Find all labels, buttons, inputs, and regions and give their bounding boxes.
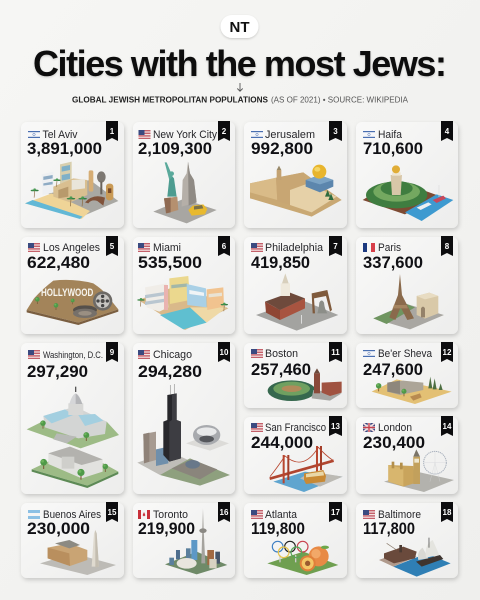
rank badge: 13 (331, 422, 340, 431)
flag: USA (251, 423, 263, 432)
flag: USA (28, 350, 40, 359)
illustration: Olympic rings and peach (267, 541, 338, 575)
rank badge: 11 (331, 348, 340, 357)
population: 535,500 (138, 253, 202, 272)
rank badge: 5 (110, 242, 115, 251)
flag: USA (251, 243, 263, 252)
rank badge (106, 342, 118, 362)
illustration: Statue of Liberty and Empire State (153, 162, 217, 223)
population: 710,600 (363, 139, 423, 158)
panel: Be'er Sheva (356, 342, 458, 408)
city name: Buenos Aires (43, 509, 101, 521)
flag: USA (138, 350, 150, 359)
city name: Toronto (153, 509, 188, 521)
flag: USA (251, 510, 263, 519)
rank badge: 7 (333, 242, 338, 251)
population: 219,900 (138, 519, 195, 538)
city name: Chicago (153, 349, 192, 361)
city name: New York City (153, 129, 217, 141)
rank badge: 2 (222, 127, 227, 136)
city name: Los Angeles (43, 242, 100, 254)
illustration: Parliament, Big Ben and London Eye (384, 449, 454, 492)
city name: Baltimore (378, 509, 421, 521)
illustration: U.S. Capitol and White House (27, 387, 119, 488)
illustration: Baltimore harbor and tall ship (379, 538, 451, 577)
logo badge: NT (220, 15, 258, 38)
city name: Tel Aviv (42, 129, 78, 141)
panel: Los Angeles (21, 236, 124, 334)
city name: Atlanta (265, 509, 298, 521)
panel: Buenos Aires (21, 502, 124, 578)
city name: London (378, 422, 412, 434)
flag: Canada (138, 510, 150, 519)
rank badge: 18 (443, 508, 452, 517)
rank badge: 9 (110, 348, 115, 357)
panel: Philadelphia (244, 236, 347, 334)
rank badge: 14 (443, 422, 452, 431)
panel: Tel Aviv (21, 121, 124, 228)
population: 230,000 (27, 519, 90, 538)
population: 244,000 (251, 433, 313, 452)
illustration: Haifa terraces and harbor (363, 165, 453, 221)
rank badge (218, 342, 230, 362)
panel: Washington, D.C. (21, 342, 124, 494)
city name: Washington, D.C. (43, 350, 103, 360)
population: 3,891,000 (27, 139, 102, 158)
rank badge: 15 (108, 508, 117, 517)
population: 119,800 (251, 519, 305, 538)
illustration: Tel Aviv skyline and beach (25, 162, 118, 219)
rank badge: 4 (445, 127, 450, 136)
population: 117,800 (363, 519, 415, 538)
population: 230,400 (363, 433, 425, 452)
city name: San Francisco (265, 422, 326, 434)
rank badge: 12 (443, 348, 452, 357)
population: 294,280 (138, 362, 202, 381)
population: 992,800 (251, 139, 313, 158)
flag: USA (363, 510, 375, 519)
rank badge: 8 (445, 242, 450, 251)
city name: Paris (378, 242, 401, 254)
flag: Israel (251, 130, 263, 139)
flag: Israel (363, 130, 375, 139)
illustration: CN Tower and skyline (165, 508, 227, 574)
population: 247,600 (363, 360, 423, 379)
city name: Be'er Sheva (378, 348, 433, 360)
illustration: Be'er Sheva desert and building (372, 377, 452, 404)
illustration: Independence Hall and Liberty Bell (256, 273, 338, 331)
illustration: Eiffel Tower and Arc de Triomphe (373, 274, 444, 329)
flag: USA (28, 243, 40, 252)
illustration: Fenway Park and brick buildings (268, 368, 342, 401)
population: 622,480 (27, 253, 90, 272)
flag: Israel (363, 349, 375, 358)
arrow (237, 83, 243, 91)
panel: Miami (133, 236, 235, 334)
panel: Toronto (133, 502, 235, 578)
rank badge: 1 (110, 127, 115, 136)
panel: Atlanta (244, 502, 347, 578)
logo badge: NT: NT (230, 19, 250, 36)
subtitle: (AS OF 2021) • SOURCE: WIKIPEDIA (271, 96, 409, 104)
illustration: Old City walls and Dome of the Rock (250, 165, 342, 217)
panel: Paris (356, 236, 458, 334)
flag: USA (138, 130, 150, 139)
panel: Jerusalem (244, 121, 347, 228)
subtitle: GLOBAL JEWISH METROPOLITAN POPULATIONS (72, 96, 269, 104)
rank badge: 3 (333, 127, 338, 136)
panel: Baltimore (356, 502, 458, 578)
title: Cities with the most Jews: (33, 43, 447, 84)
rank badge: 16 (220, 508, 229, 517)
flag: Argentina (28, 510, 40, 519)
flag: France (363, 243, 375, 252)
illustration: Teatro Colón and Obelisco (40, 530, 116, 575)
panel: London (356, 416, 458, 494)
city name: Miami (153, 242, 181, 254)
population: 297,290 (27, 362, 88, 381)
panel: San Francisco (244, 416, 347, 494)
city name: Haifa (378, 129, 403, 141)
panel: Haifa (356, 121, 458, 228)
panel: New York City (133, 121, 235, 228)
illustration: Willis Tower and Cloud Gate (137, 384, 230, 486)
panel: Chicago (133, 342, 235, 494)
illustration: Golden Gate Bridge and cable car (269, 446, 343, 492)
population: 419,850 (251, 253, 310, 272)
flag: Israel (28, 130, 40, 139)
illustration: Hollywood sign and film reel: HOLLYWOOD (41, 287, 93, 299)
rank badge: 6 (222, 242, 227, 251)
illustration: Miami art deco hotels and beach (137, 276, 228, 330)
panel: Boston (244, 342, 347, 408)
flag: UK (363, 423, 375, 432)
city name: Philadelphia (265, 242, 324, 254)
flag: USA (138, 243, 150, 252)
flag: USA (251, 349, 263, 358)
rank badge: 10 (220, 348, 229, 357)
population: 257,460 (251, 360, 311, 379)
rank badge: 17 (331, 508, 340, 517)
city name: Boston (265, 348, 298, 360)
population: 337,600 (363, 253, 423, 272)
city name: Jerusalem (265, 129, 315, 141)
subtitle (72, 96, 409, 104)
population: 2,109,300 (138, 139, 212, 158)
